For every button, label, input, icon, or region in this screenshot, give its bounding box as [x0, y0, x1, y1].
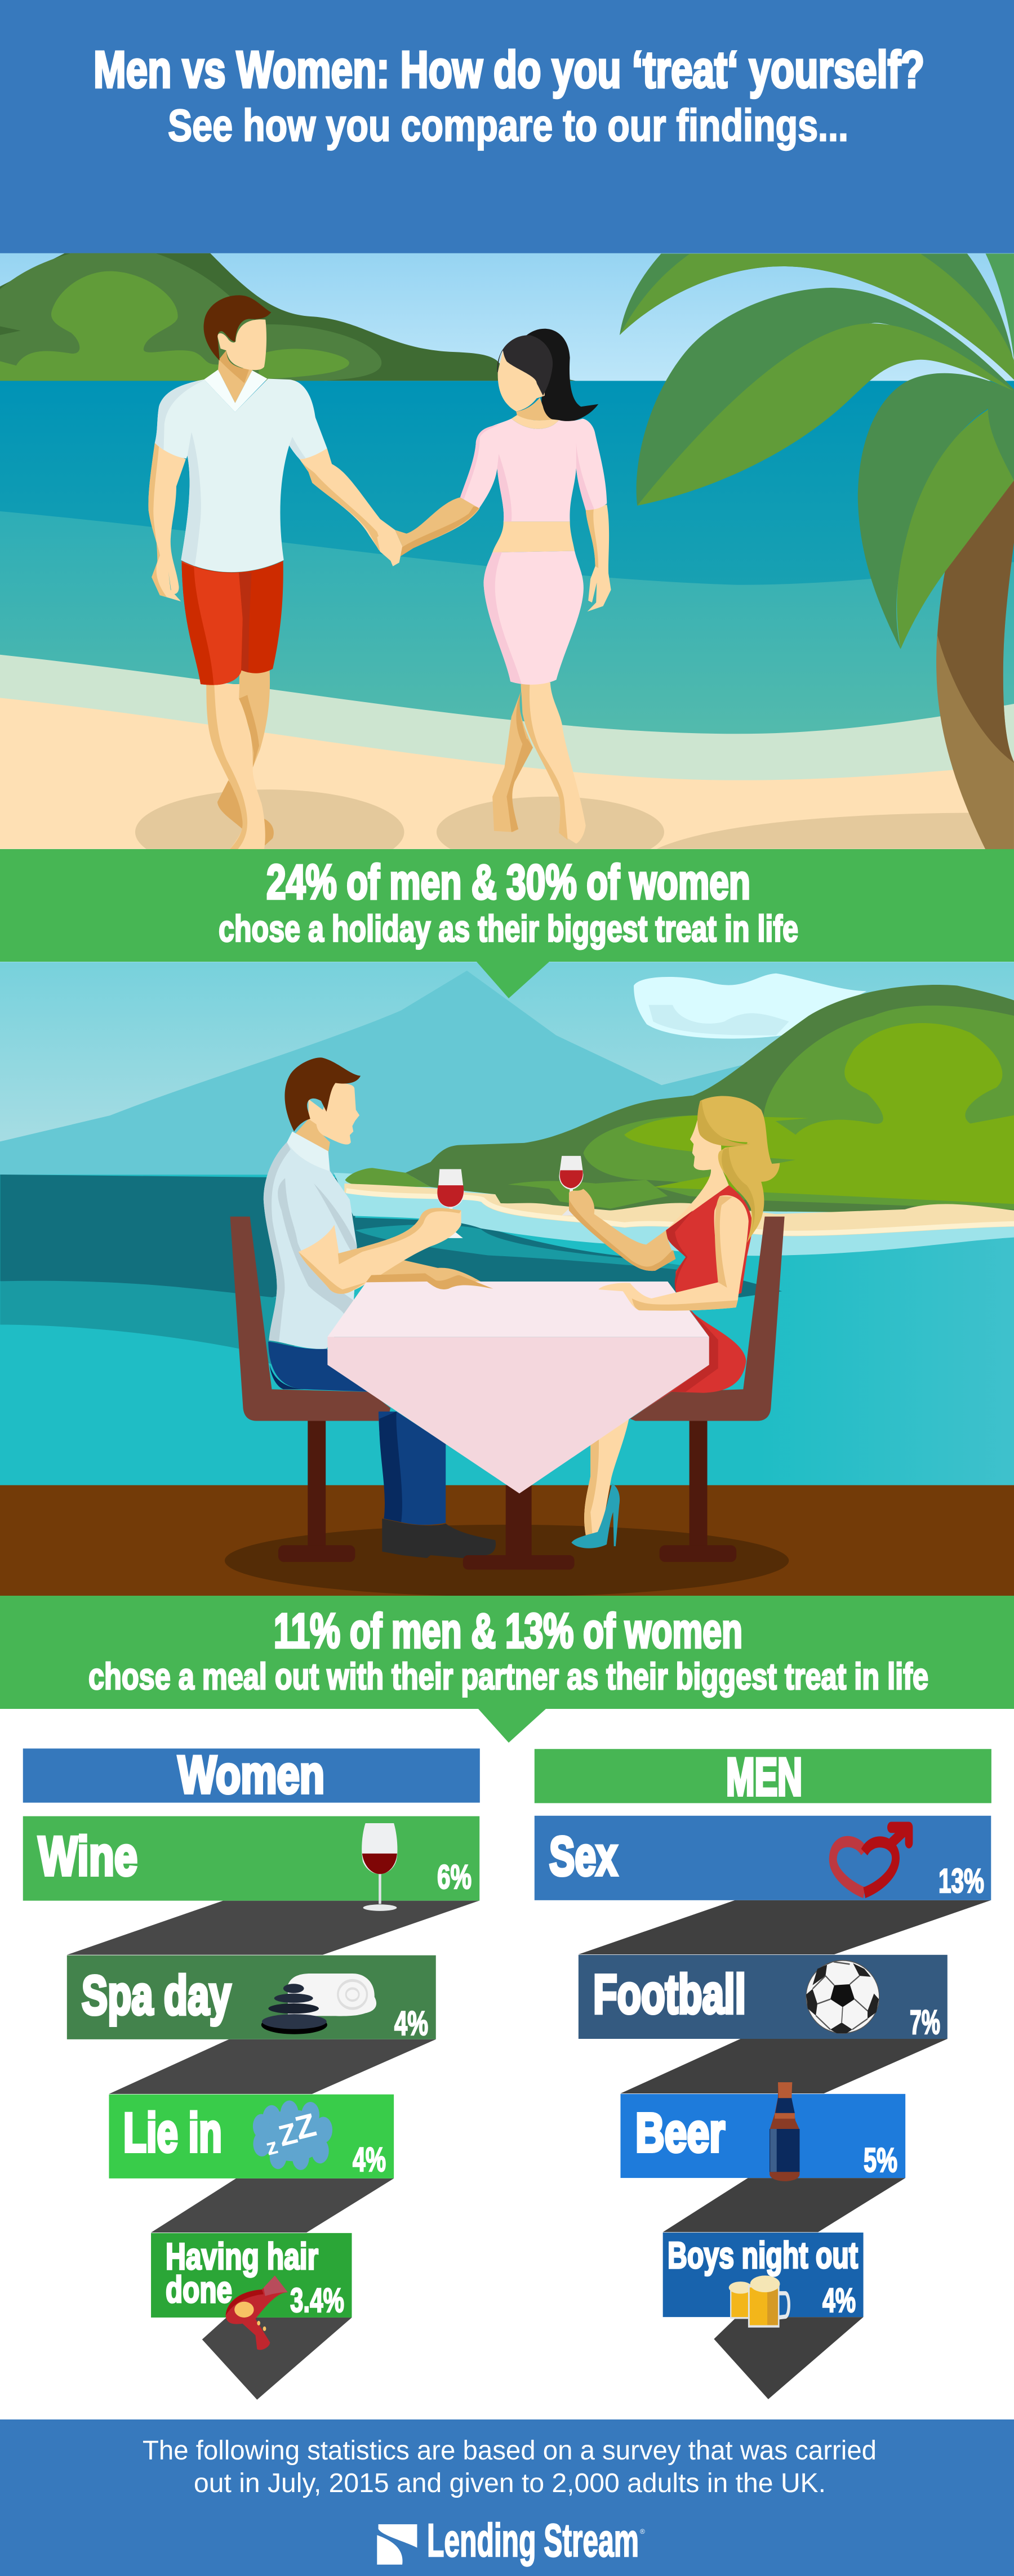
wine glass: man — [437, 1169, 464, 1238]
icon: beer bottle — [770, 2082, 799, 2181]
icon: football — [806, 1961, 879, 2033]
lie in label: Lie in — [123, 2102, 222, 2163]
logo mark — [377, 2524, 417, 2565]
cloud — [634, 974, 866, 1039]
having hair done value: 3.4% — [290, 2282, 344, 2319]
green stat band: meal out — [0, 1596, 1014, 1709]
logo wordmark: Lending Stream — [427, 2514, 639, 2566]
wine label: Wine — [38, 1825, 137, 1887]
men column — [535, 1747, 991, 2399]
spa day value: 4% — [394, 2004, 428, 2042]
man walking — [148, 295, 402, 849]
holiday percentages: 24% of men & 30% of women — [266, 855, 750, 909]
sea — [0, 381, 1014, 851]
woman seated — [569, 1096, 780, 1548]
beer label: Beer — [635, 2102, 725, 2163]
registered mark: ® — [640, 2528, 645, 2535]
holiday band pointer — [477, 962, 549, 998]
right chair — [630, 1217, 785, 1562]
icon: heart male symbol — [833, 1827, 909, 1893]
sex value: 13% — [939, 1862, 984, 1900]
holiday caption: chose a holiday as their biggest treat in life — [219, 908, 798, 949]
lie in value: 4% — [353, 2141, 386, 2178]
spa day label: Spa day — [82, 1965, 231, 2026]
sleep cloud letters: z — [264, 2133, 281, 2160]
women ribbon and bars — [23, 1748, 480, 2400]
football value: 7% — [910, 2003, 940, 2041]
sand — [0, 698, 985, 849]
shoreline and dinner table — [0, 985, 1014, 1596]
boys night out value: 4% — [822, 2282, 856, 2319]
beach strip — [344, 1184, 1014, 1236]
bright sea — [0, 1175, 1014, 1490]
men heading: MEN — [726, 1747, 802, 1806]
deck — [0, 1485, 1014, 1596]
survey note: The following statistics are based on a survey that was carried — [143, 2436, 877, 2466]
foam — [333, 1173, 1014, 1256]
meal band pointer — [478, 1709, 546, 1743]
icon: hair dryer — [226, 2275, 288, 2350]
man seated — [264, 1057, 496, 1558]
headland — [0, 253, 576, 381]
having hair done label — [166, 2235, 318, 2310]
palm tree — [620, 253, 1014, 850]
survey note: out in July, 2015 and given to 2,000 adults in the UK. — [194, 2468, 826, 2498]
beer value: 5% — [864, 2141, 897, 2179]
wine value: 6% — [437, 1858, 472, 1896]
dark sea — [0, 1175, 782, 1365]
mountain — [0, 971, 742, 1175]
having hair done label: Having hair — [166, 2235, 318, 2277]
women column — [23, 1745, 480, 2400]
having hair done label: done — [166, 2269, 232, 2310]
hands on table — [366, 1195, 749, 1311]
sleep cloud letters — [264, 2106, 320, 2160]
icon: wine glass — [362, 1823, 397, 1911]
wine glass: woman — [559, 1156, 583, 1216]
icon: spa towel and stones — [261, 1974, 376, 2034]
woman walking — [377, 329, 611, 843]
left chair — [230, 1217, 390, 1562]
icon: sleep cloud — [253, 2100, 332, 2170]
boys night out label: Boys night out — [668, 2234, 858, 2276]
islet — [345, 1168, 430, 1187]
football label: Football — [593, 1963, 746, 2025]
table — [327, 1282, 709, 1570]
survey note — [143, 2436, 877, 2498]
sleep cloud letters: Z — [291, 2106, 320, 2147]
meal percentages: 11% of men & 13% of women — [274, 1604, 742, 1658]
header band — [0, 0, 1014, 253]
sex label: Sex — [549, 1825, 617, 1887]
icon: beer mugs — [729, 2275, 789, 2327]
sleep cloud letters: Z — [275, 2117, 301, 2153]
subtitle: See how you compare to our findings... — [168, 100, 848, 150]
green hill — [406, 985, 1014, 1214]
dinner scene background — [0, 962, 1014, 1490]
men ribbon and bars — [535, 1749, 991, 2399]
green stat band: holiday — [0, 849, 1014, 962]
walking couple — [148, 295, 611, 849]
footer band — [0, 2419, 1014, 2576]
women heading: Women — [178, 1745, 324, 1804]
beach scene background — [0, 253, 1014, 874]
